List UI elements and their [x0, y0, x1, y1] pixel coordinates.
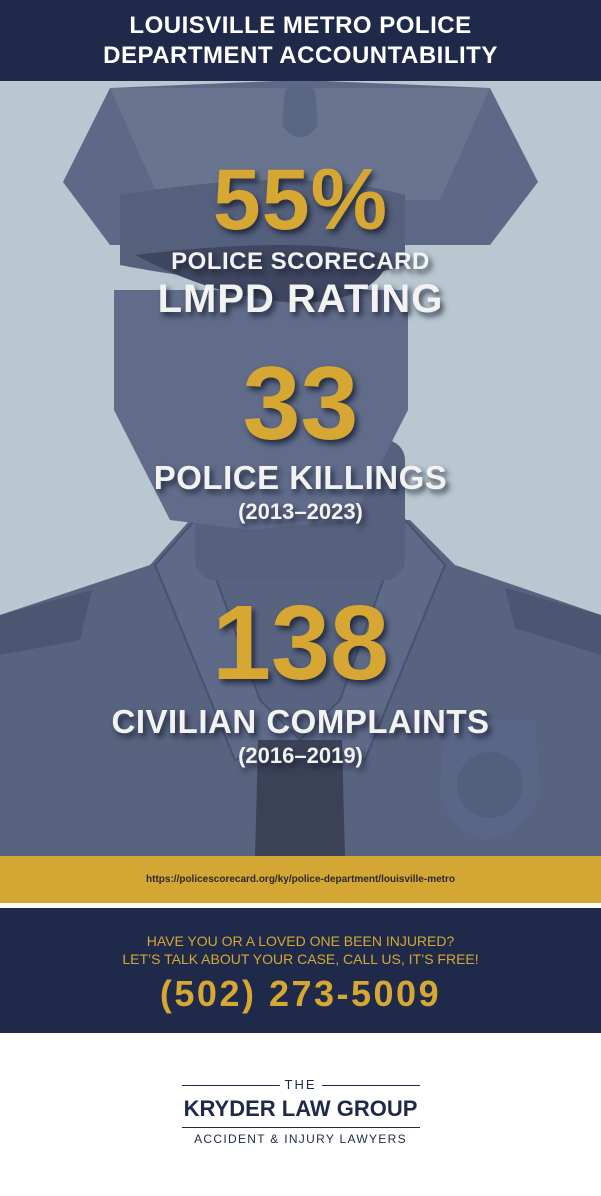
stat: 138 civilian complaints: CIVILIAN COMPLAINTS [112, 703, 490, 740]
phone number: (502) 273-5009 [160, 973, 441, 1014]
logo: Kryder Law Group: THE [284, 1077, 316, 1092]
call to action panel: LET’S TALK ABOUT YOUR CASE, CALL US, IT’S FREE! [122, 951, 479, 967]
stat: 55% scorecard rating: 55% [213, 152, 388, 248]
logo: Kryder Law Group: ACCIDENT & INJURY LAWYERS [194, 1132, 407, 1146]
stat: 55% scorecard rating: LMPD RATING [158, 277, 443, 321]
header: title [0, 0, 601, 81]
source url bar [0, 856, 601, 903]
stat: 55% scorecard rating [158, 152, 447, 321]
stat: 138 civilian complaints: 138 [212, 584, 389, 702]
stat: 33 police killings: (2013–2023) [238, 499, 363, 524]
stat: 138 civilian complaints [112, 584, 494, 773]
logo: Kryder Law Group: KRYDER LAW GROUP [184, 1096, 417, 1121]
header: title: DEPARTMENT ACCOUNTABILITY [103, 42, 498, 69]
source url bar: https://policescorecard.org/ky/police-department/louisville-metro [146, 874, 455, 885]
logo: Kryder Law Group [182, 1077, 420, 1146]
stat: 33 police killings: POLICE KILLINGS [154, 459, 447, 496]
stat: 138 civilian complaints: (2016–2019) [238, 743, 363, 768]
header: title: LOUISVILLE METRO POLICE [129, 12, 472, 39]
call to action panel [0, 908, 601, 1033]
call to action panel: HAVE YOU OR A LOVED ONE BEEN INJURED? [147, 933, 454, 949]
illustration: police officer silhouette [0, 81, 601, 856]
stat: 33 police killings [154, 346, 452, 529]
stat: 33 police killings: 33 [243, 346, 358, 462]
stat: 55% scorecard rating: POLICE SCORECARD [171, 248, 430, 275]
